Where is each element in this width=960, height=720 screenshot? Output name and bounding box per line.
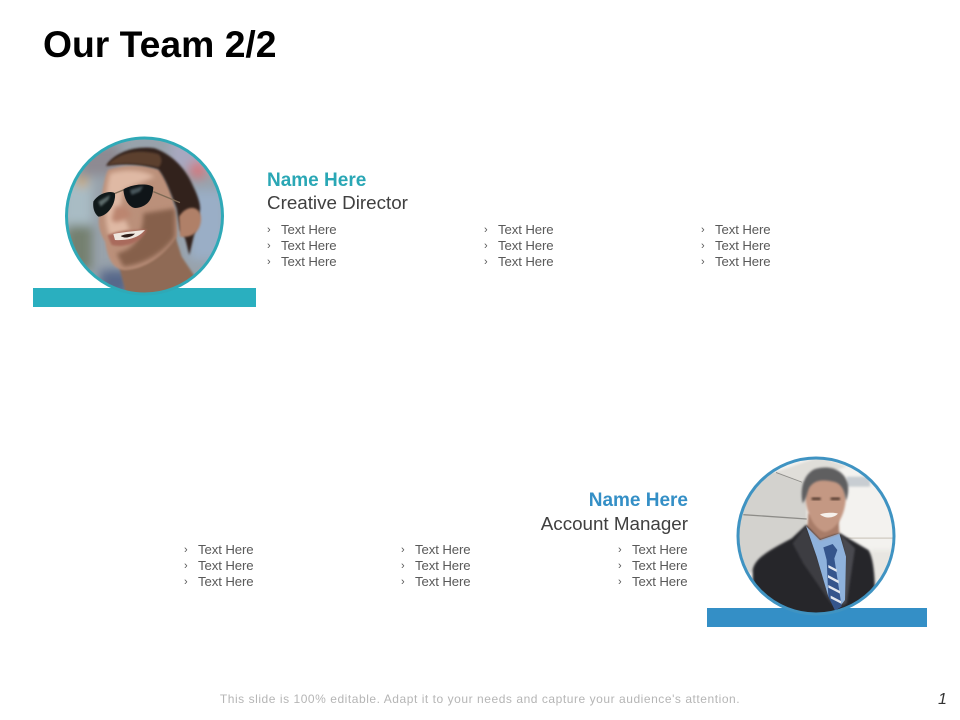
list: creative director column 2: Text Here (498, 222, 554, 237)
list: creative director column 3: Text Here (715, 222, 771, 237)
list: creative director column 3: Text Here (715, 254, 771, 269)
list: creative director column 2: › (484, 256, 488, 268)
list: account manager column 2: › (401, 576, 405, 588)
hair (106, 148, 200, 255)
list: account manager column 1: Text Here (198, 558, 254, 573)
wall panels (733, 472, 807, 573)
list: account manager column 1: › (184, 544, 188, 556)
neck (807, 513, 839, 540)
list: creative director column 1: › (267, 256, 271, 268)
list: creative director column 1: Text Here (281, 254, 337, 269)
sunglasses (93, 185, 180, 217)
nose (112, 207, 132, 222)
portrait ring (66, 138, 222, 294)
accent bar: account manager (707, 608, 927, 627)
role: creative director: Creative Director (267, 192, 408, 213)
list: account manager column 1: Text Here (198, 574, 254, 589)
list: creative director column 1: Text Here (281, 222, 337, 237)
portrait: account manager (733, 455, 900, 620)
suit (753, 525, 875, 617)
list: creative director column 2 (484, 222, 554, 269)
name: creative director: Name Here (267, 170, 366, 191)
list: account manager column 1 (184, 542, 254, 589)
list: creative director column 3: › (701, 224, 705, 236)
mouth (107, 229, 147, 246)
eyes and smile (812, 498, 840, 500)
list: account manager column 1: Text Here (198, 542, 254, 557)
list: account manager column 3: Text Here (632, 542, 688, 557)
neck (118, 237, 194, 292)
ear (179, 208, 201, 237)
name: account manager: Name Here (589, 490, 688, 511)
portrait: creative director (65, 136, 224, 292)
list: creative director column 1: › (267, 224, 271, 236)
list: creative director column 1 (267, 222, 337, 269)
footer note: This slide is 100% editable. Adapt it to your needs and capture your audience's attention. (220, 692, 740, 706)
face (99, 166, 177, 270)
list: creative director column 2: › (484, 224, 488, 236)
list: account manager column 1: › (184, 576, 188, 588)
page number: 1 (938, 691, 947, 708)
hair (802, 467, 848, 503)
list: account manager column 3: › (618, 576, 622, 588)
list: account manager column 3 (618, 542, 688, 589)
list: creative director column 3 (701, 222, 771, 269)
list: account manager column 3: › (618, 544, 622, 556)
portrait ring (738, 458, 894, 614)
list: creative director column 1: › (267, 240, 271, 252)
list: account manager column 2: › (401, 544, 405, 556)
head (805, 473, 846, 532)
list: creative director column 2: Text Here (498, 254, 554, 269)
shirt (806, 526, 846, 607)
list: account manager column 3: › (618, 560, 622, 572)
list: creative director column 1: Text Here (281, 238, 337, 253)
tie (823, 544, 842, 611)
list: account manager column 3: Text Here (632, 574, 688, 589)
list: account manager column 2: Text Here (415, 574, 471, 589)
list: creative director column 3: Text Here (715, 238, 771, 253)
list: creative director column 2: › (484, 240, 488, 252)
title: Our Team 2/2 (43, 23, 277, 65)
role: account manager: Account Manager (541, 513, 688, 534)
list: creative director column 2: Text Here (498, 238, 554, 253)
list: creative director column 3: › (701, 256, 705, 268)
list: account manager column 2: Text Here (415, 542, 471, 557)
accent bar: creative director (33, 288, 256, 307)
list: account manager column 2: Text Here (415, 558, 471, 573)
list: account manager column 2: › (401, 560, 405, 572)
list: account manager column 2 (401, 542, 471, 589)
list: creative director column 3: › (701, 240, 705, 252)
list: account manager column 1: › (184, 560, 188, 572)
list: account manager column 3: Text Here (632, 558, 688, 573)
